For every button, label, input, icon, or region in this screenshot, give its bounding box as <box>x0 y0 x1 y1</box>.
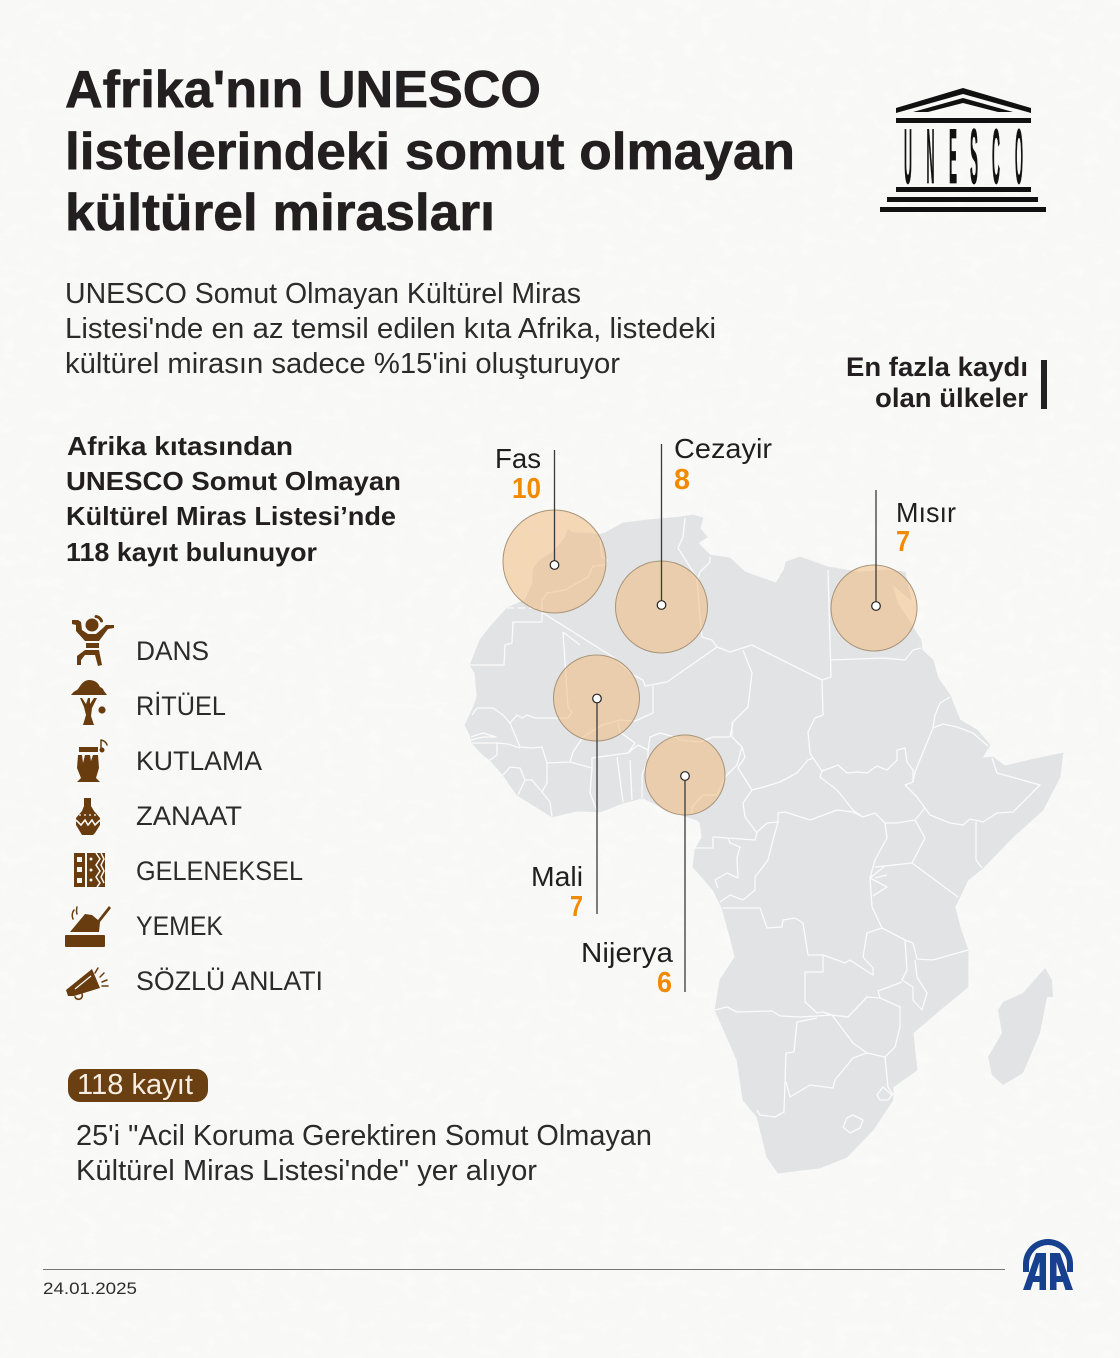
title <box>65 61 795 242</box>
map of Africa <box>465 515 1063 1173</box>
marker: Mali <box>531 655 640 923</box>
intro text: Listesi'nde en az temsil edilen kıta Afrika, listedeki <box>65 313 716 345</box>
marker: Fas <box>495 443 606 613</box>
island: Madagascar <box>988 968 1053 1085</box>
icon: UNESCO logo: U <box>904 112 912 200</box>
marker: Cezayir <box>616 433 772 653</box>
marker: Nijerya: 6 <box>657 967 672 999</box>
date: 24.01.2025 <box>43 1279 137 1298</box>
marker: Fas: Fas <box>495 443 541 474</box>
icon: UNESCO logo: O <box>1015 112 1023 200</box>
legend item: sözlü anlatı <box>66 966 323 999</box>
marker: Mısır: 7 <box>896 526 910 558</box>
title: Afrika'nın UNESCO <box>65 61 541 119</box>
legend item: kutlama <box>77 740 262 782</box>
marker: Nijerya <box>581 735 725 999</box>
marker: Mısır <box>831 490 956 651</box>
text block: urgent safeguarding: Kültürel Miras Listesi'nde" yer alıyor <box>76 1155 537 1187</box>
marker: Mali: Mali <box>531 861 583 892</box>
legend item: kutlama: KUTLAMA <box>136 746 262 776</box>
text block: 118 entries <box>66 431 401 567</box>
intro text: kültürel mirasın sadece %15'ini oluşturuyor <box>65 348 620 380</box>
marker: Mısır: Mısır <box>896 497 956 528</box>
icon: UNESCO logo: C <box>992 112 1000 200</box>
icon: UNESCO logo: E <box>949 112 957 200</box>
legend item: yemek: YEMEK <box>136 911 223 941</box>
legend item: dans: DANS <box>136 636 209 666</box>
intro text <box>65 278 716 380</box>
text block: 118 entries: UNESCO Somut Olmayan <box>66 466 401 496</box>
legend item: zanaat <box>76 798 242 835</box>
title: kültürel mirasları <box>65 184 495 242</box>
marker: Fas: 10 <box>512 473 541 505</box>
legend item: ritüel: RİTÜEL <box>136 690 226 721</box>
legend item: dans <box>72 616 209 666</box>
text block: 118 entries: Afrika kıtasından <box>67 431 293 461</box>
marker: Nijerya: Nijerya <box>581 937 673 968</box>
country borders <box>470 518 1040 1133</box>
legend item: geleneksel <box>74 853 303 887</box>
icon: UNESCO logo: S <box>970 112 978 200</box>
heading: countries with most entries <box>846 352 1047 413</box>
heading: countries with most entries: En fazla kaydı <box>846 352 1028 382</box>
icon: UNESCO logo <box>880 88 1046 212</box>
text block: urgent safeguarding: 25'i "Acil Koruma Gerektiren Somut Olmayan <box>76 1120 652 1152</box>
footer rule <box>43 1268 1005 1270</box>
text block: 118 entries: Kültürel Miras Listesi’nde <box>66 501 396 531</box>
marker: Cezayir: Cezayir <box>674 433 772 464</box>
legend item: geleneksel: GELENEKSEL <box>136 856 303 886</box>
legend: categories <box>65 616 323 999</box>
marker: Mali: 7 <box>570 891 583 923</box>
legend item: yemek <box>65 906 223 947</box>
icon: AA logo <box>1023 1239 1073 1290</box>
callout: 118 kayıt: 118 kayıt <box>77 1069 193 1101</box>
text block: urgent safeguarding <box>76 1120 652 1187</box>
intro text: UNESCO Somut Olmayan Kültürel Miras <box>65 278 581 310</box>
icon: UNESCO logo: N <box>926 112 934 200</box>
legend item: sözlü anlatı: SÖZLÜ ANLATI <box>136 966 323 996</box>
marker: Cezayir: 8 <box>674 464 690 496</box>
legend item: ritüel <box>71 680 226 725</box>
text block: 118 entries: 118 kayıt bulunuyor <box>66 537 317 567</box>
heading: countries with most entries: olan ülkeler <box>875 383 1028 413</box>
legend item: zanaat: ZANAAT <box>136 801 242 831</box>
title: listelerindeki somut olmayan <box>65 123 795 181</box>
